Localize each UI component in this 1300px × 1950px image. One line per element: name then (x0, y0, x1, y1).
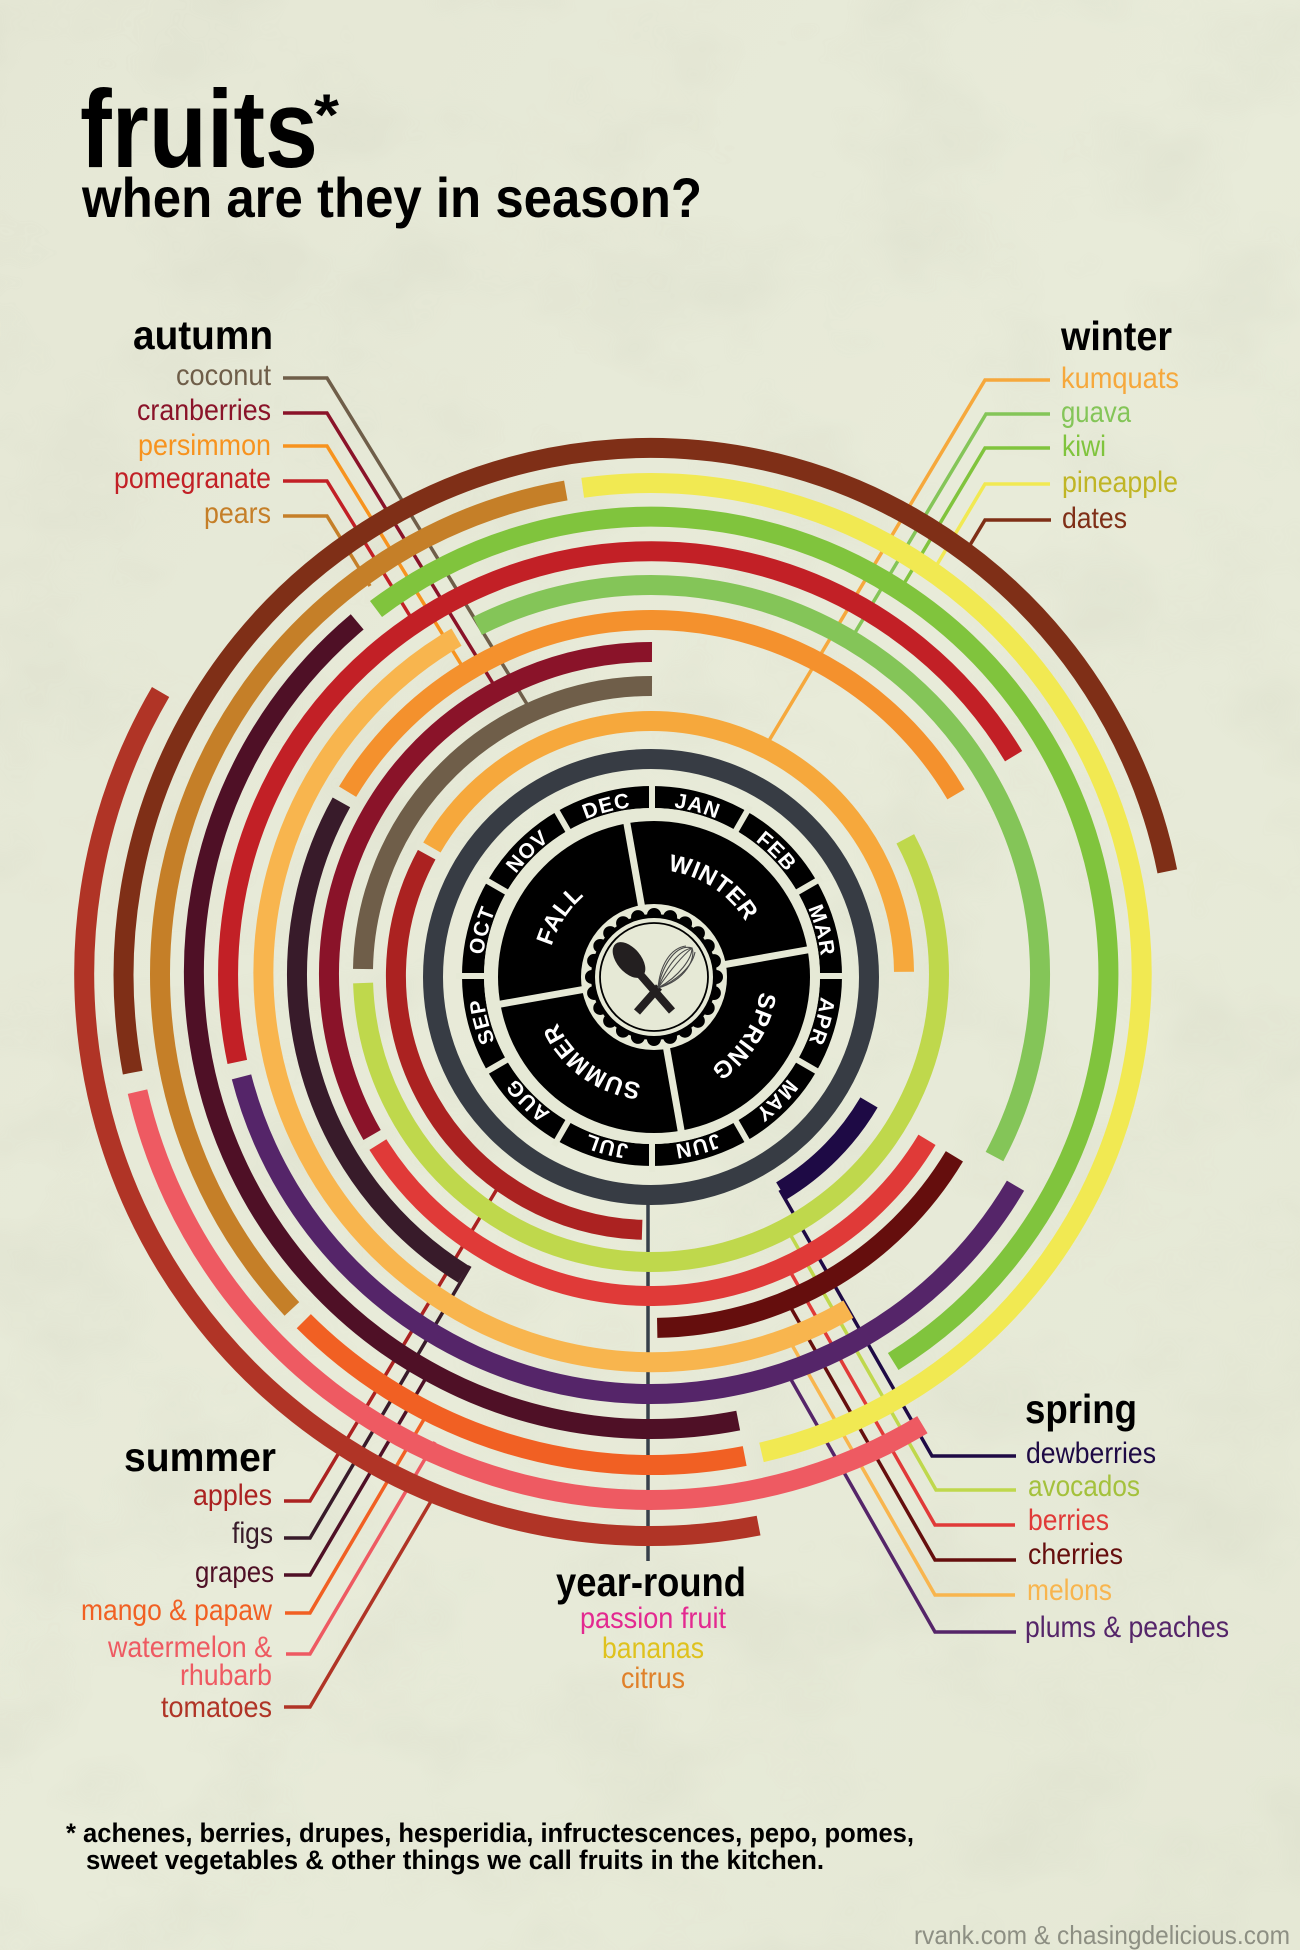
label: mango and papaw: mango & papaw (81, 1594, 272, 1627)
legend: year-round (556, 1200, 746, 1695)
heading: spring: spring (1025, 1386, 1137, 1432)
arc: watermelon and rhubarb (138, 1092, 922, 1500)
arc: figs (297, 802, 463, 1274)
season wheel: SUMMER (544, 1023, 640, 1099)
heading: winter: winter (1060, 313, 1172, 359)
label: cranberries: cranberries (137, 394, 271, 427)
label: pineapple: pineapple (1062, 466, 1178, 499)
month wheel: DEC (582, 794, 629, 819)
label: persimmon: persimmon (138, 429, 271, 462)
title: * (314, 83, 339, 148)
footnote: sweet vegetables & other things we call fruits in the kitchen. (86, 1845, 824, 1875)
arc: cherries (657, 1156, 954, 1328)
month wheel: JUN (676, 1134, 718, 1158)
label: pineapple (929, 466, 1178, 578)
label: coconut (176, 359, 530, 709)
icon: whisk (637, 946, 695, 1012)
legend: summer (81, 1184, 500, 1724)
month labels: JAN (674, 794, 720, 818)
arc: kiwi (376, 517, 1108, 1362)
label: dewberries (780, 1190, 1156, 1470)
label: apples (193, 1184, 500, 1512)
label: guava (847, 396, 1131, 646)
season disc (498, 821, 810, 1133)
month wheel: MAY (759, 1080, 798, 1122)
label: bananas: bananas (602, 1632, 704, 1665)
label: coconut: coconut (176, 359, 272, 392)
month wheel: AUG (508, 1080, 550, 1120)
label: figs (232, 1266, 470, 1550)
month wheel: NOV (506, 829, 545, 873)
month wheel: OCT (470, 906, 494, 954)
label: pomegranate (114, 462, 418, 629)
label: figs: figs (232, 1517, 273, 1550)
label: cherries: cherries (1028, 1538, 1123, 1571)
label: guava: guava (1061, 396, 1131, 429)
arc: plums and peaches (242, 1077, 1016, 1394)
label: melons (784, 1331, 1112, 1607)
footnote: * achenes, berries, drupes, hesperidia, infructescences, pepo, pomes, (66, 1818, 914, 1848)
label: citrus: citrus (621, 1662, 685, 1695)
label: dates (961, 502, 1127, 560)
label: dates: dates (1062, 502, 1127, 535)
label: berries: berries (1028, 1504, 1109, 1537)
arc: pineapple (583, 483, 1142, 1452)
label: passion fruit: passion fruit (580, 1602, 727, 1635)
arc: cranberries (329, 652, 652, 1135)
month wheel: JUL (588, 1134, 628, 1158)
label: plums and peaches: plums & peaches (1025, 1611, 1229, 1644)
arc: tomatoes (84, 692, 759, 1536)
label: plums and peaches (785, 1369, 1229, 1644)
label: kiwi (896, 430, 1106, 597)
label: pears: pears (204, 497, 271, 530)
label: pomegranate: pomegranate (114, 462, 271, 495)
label: watermelon and rhubarb (107, 1442, 435, 1692)
label: apples: apples (193, 1479, 272, 1512)
legend: winter (764, 313, 1179, 749)
month wheel (462, 786, 842, 1166)
year-round ring (433, 759, 869, 1195)
heading: autumn: autumn (133, 312, 273, 358)
season wheel: FALL (536, 890, 584, 945)
label: berries (783, 1259, 1109, 1537)
month wheel: SEP (470, 1001, 494, 1044)
month band (473, 797, 831, 1155)
arc: dates (124, 448, 1167, 1073)
label: kumquats: kumquats (1061, 362, 1179, 395)
arc: guava (477, 585, 1040, 1157)
arc: pomegranate (228, 551, 1014, 1062)
label: watermelon and rhubarb: rhubarb (180, 1659, 272, 1692)
label: dewberries: dewberries (1026, 1437, 1156, 1470)
season wheel: SPRING (714, 993, 776, 1078)
label: melons: melons (1027, 1574, 1112, 1607)
arc: kumquats (432, 721, 904, 972)
month wheel: MAR (808, 904, 834, 956)
label: avocados: avocados (1028, 1470, 1140, 1503)
legend: spring (780, 1190, 1229, 1644)
label: kiwi: kiwi (1062, 430, 1106, 463)
label: persimmon (138, 429, 467, 674)
arc: berries (378, 1140, 927, 1296)
label: grapes: grapes (195, 1556, 274, 1589)
label: kumquats (764, 362, 1179, 749)
footnote (66, 1818, 914, 1875)
legend: autumn (114, 312, 530, 709)
label: grapes (195, 1366, 433, 1589)
arc: grapes (194, 622, 738, 1429)
label: mango and papaw (81, 1404, 433, 1627)
arc: apples (396, 855, 642, 1230)
subtitle: when are they in season? (81, 166, 702, 229)
arc: dewberries (781, 1102, 869, 1191)
icon: spoon (606, 936, 672, 1011)
label: pears (204, 497, 370, 586)
season labels: WINTER (671, 854, 756, 921)
label: cherries (783, 1294, 1123, 1571)
label: tomatoes (161, 1486, 440, 1724)
month wheel: APR (809, 997, 834, 1044)
season wheel (498, 821, 810, 1133)
leader line: year-round (646, 1200, 650, 1561)
arc: pears (160, 490, 566, 1309)
arc: mango and papaw (304, 1321, 745, 1465)
central badge (581, 904, 727, 1050)
arc: avocados (363, 839, 939, 1262)
arc: coconut (363, 686, 652, 969)
label: tomatoes: tomatoes (161, 1691, 272, 1724)
heading: year-round: year-round (556, 1559, 746, 1605)
seasonal arc chart (84, 448, 1167, 1536)
label: cranberries (137, 394, 497, 690)
title: fruits (80, 68, 318, 191)
arc: melons (263, 637, 848, 1362)
label: watermelon and rhubarb: watermelon & (107, 1631, 272, 1664)
heading: summer: summer (124, 1434, 276, 1480)
arc: persimmon (348, 620, 956, 794)
month wheel: FEB (756, 830, 795, 870)
label: avocados (782, 1220, 1140, 1503)
